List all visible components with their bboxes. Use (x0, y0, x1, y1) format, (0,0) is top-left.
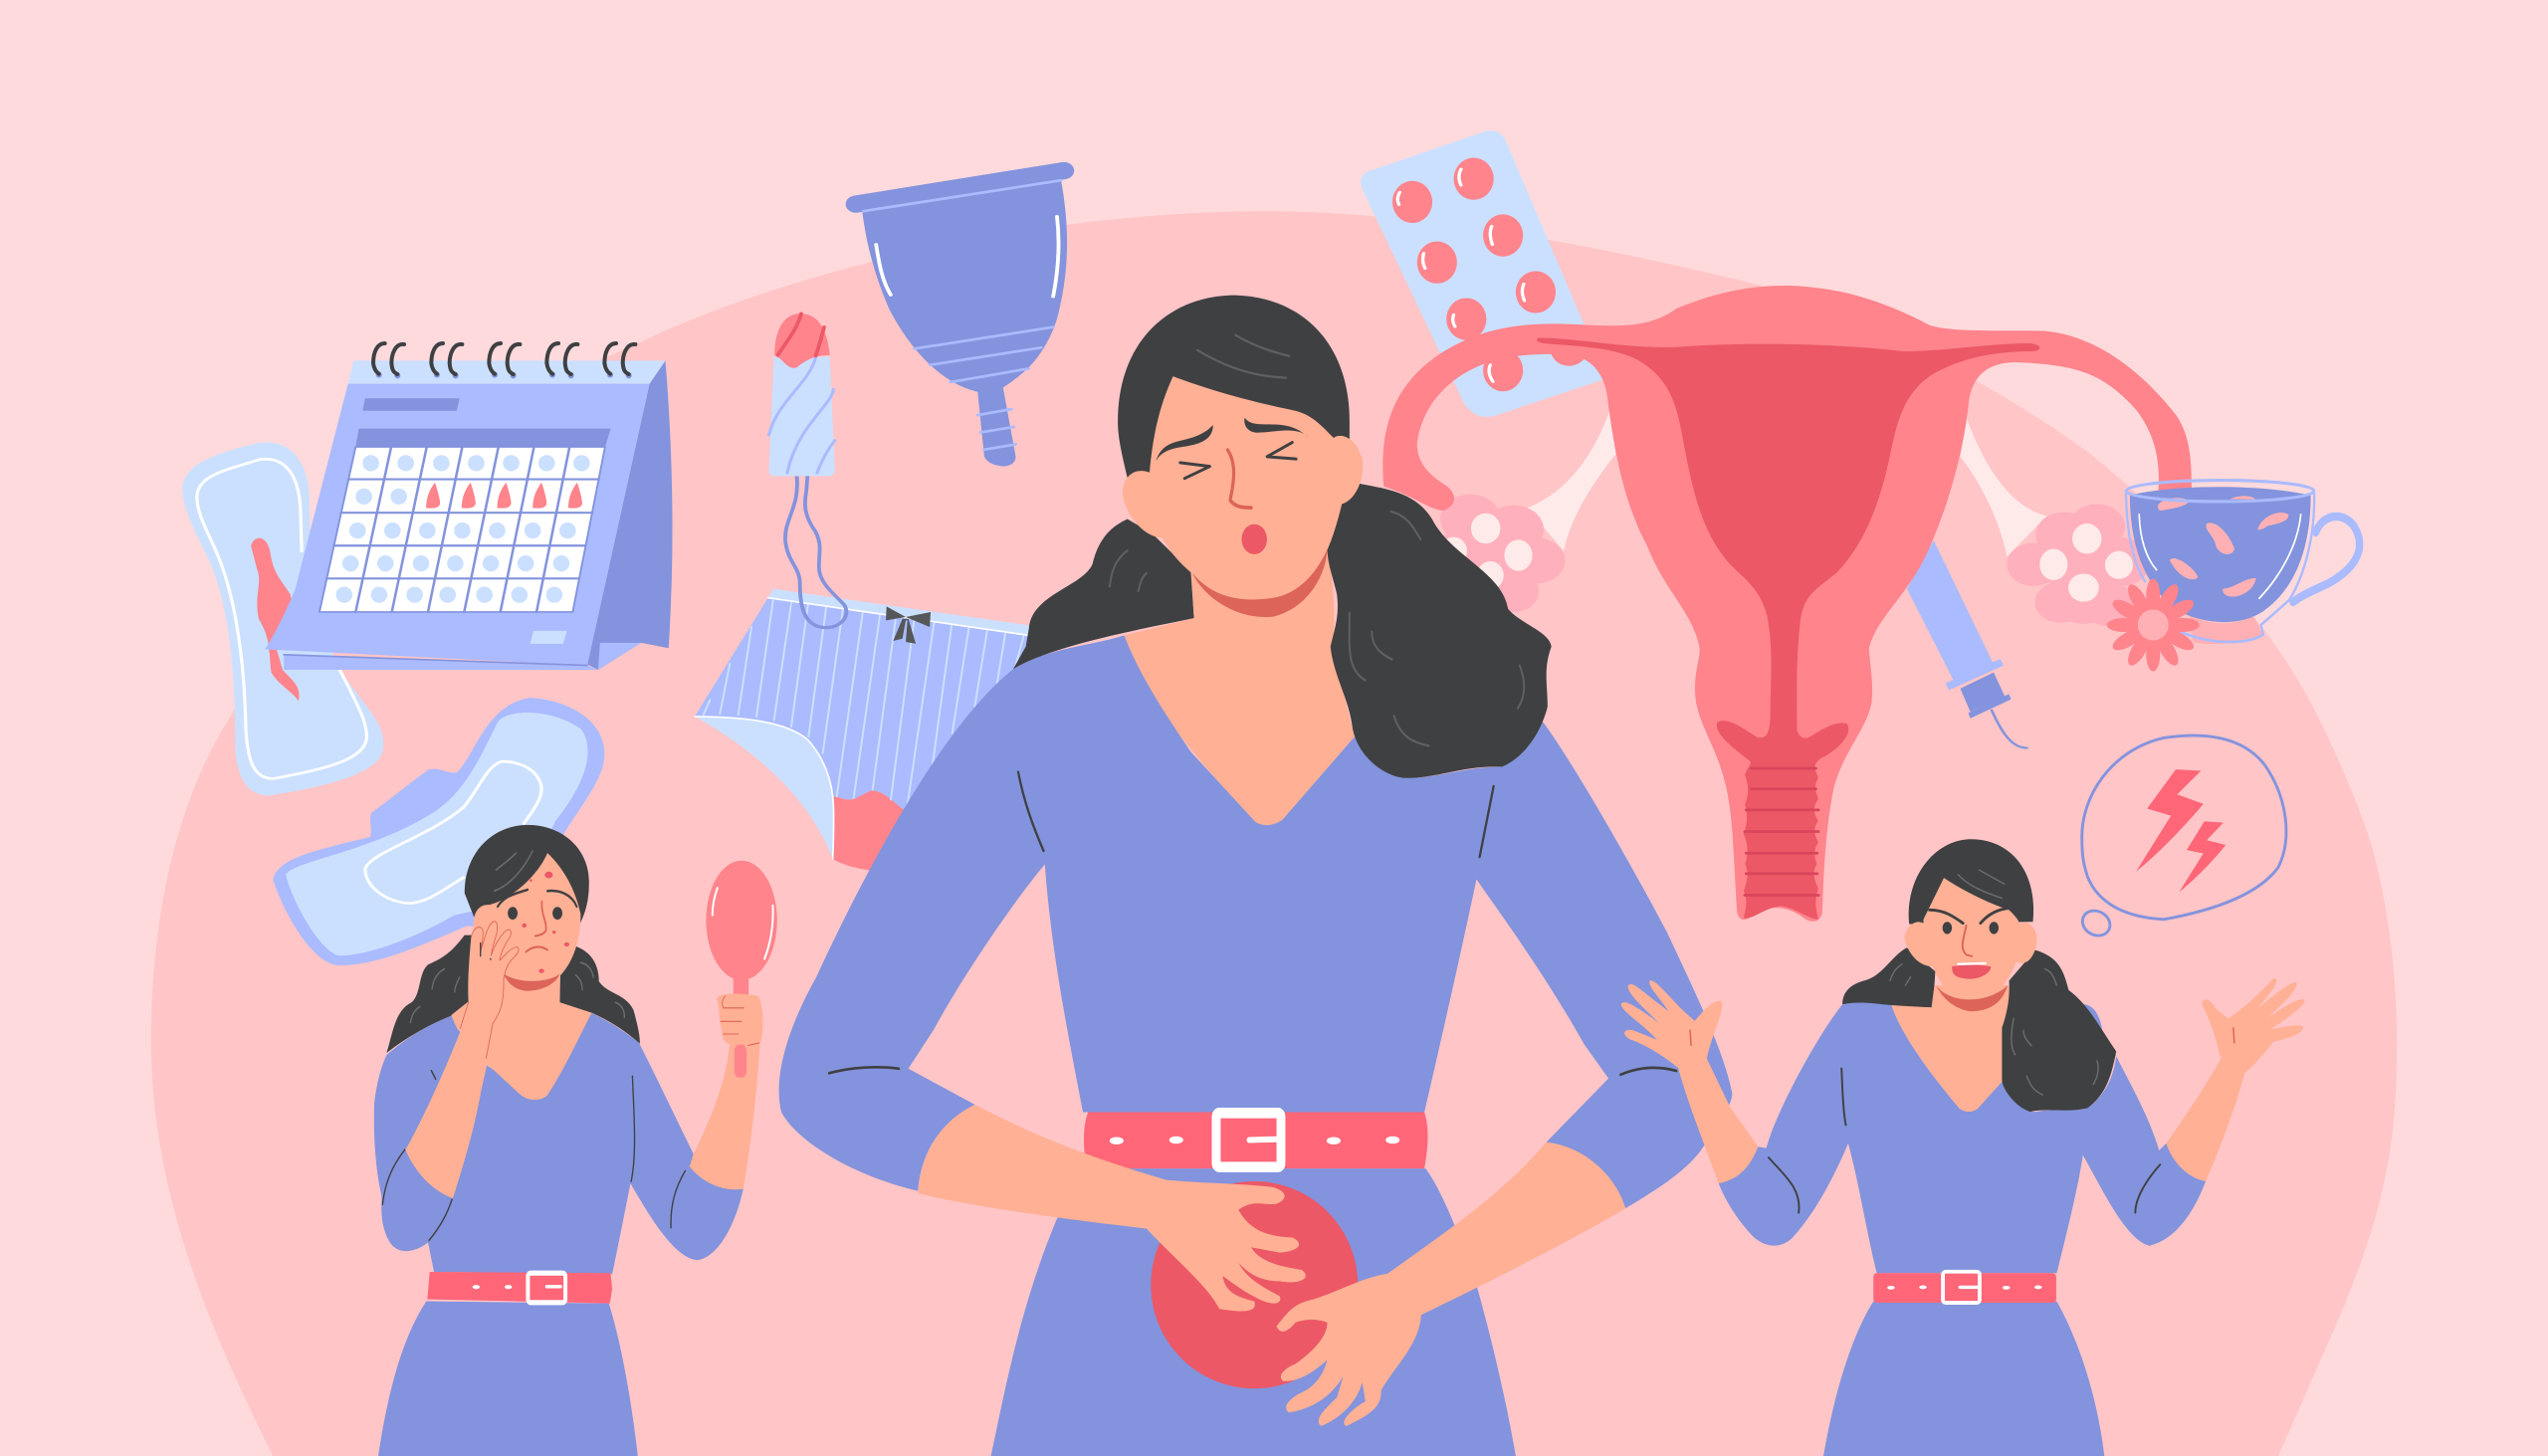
calendar grid (319, 447, 605, 612)
uterine cavity (1537, 338, 2039, 920)
angry woman with raised hands (1621, 839, 2304, 1456)
raised arm left (1621, 980, 1758, 1183)
hair strands (1890, 870, 2098, 1095)
background blob (151, 211, 2397, 1456)
belt (1084, 1113, 1427, 1168)
face (1123, 376, 1363, 617)
central woman holding abdomen (779, 296, 1732, 1456)
right ovary (1961, 419, 2150, 627)
icon: tampon (768, 313, 846, 628)
arm: right (1277, 1143, 1625, 1426)
icon: desk calendar (265, 360, 673, 670)
icon: herbal tea cup (2126, 481, 2360, 644)
hair (1013, 296, 1350, 669)
icon: underwear with stain (695, 589, 1029, 871)
hair: right lock (1328, 482, 1552, 778)
hand mirror (690, 861, 777, 1189)
creases (382, 1071, 685, 1240)
woman with acne holding mirror (374, 825, 777, 1456)
belt (1873, 1272, 2056, 1303)
raised arm right (2166, 978, 2304, 1181)
icon: syringe (1907, 540, 2026, 748)
icon: pill blister pack (1361, 130, 1607, 417)
dress creases (829, 772, 1676, 1075)
belt (427, 1272, 612, 1304)
hand on cheek (443, 922, 519, 1075)
hair (386, 825, 640, 1053)
abdominal pain circle (1151, 1181, 1358, 1388)
bow (886, 606, 931, 644)
chest (1124, 549, 1355, 825)
creases (1769, 1069, 2160, 1213)
chest (1891, 985, 2010, 1112)
chest (451, 973, 591, 1100)
left ovary (1430, 408, 1615, 612)
hair right lock (2002, 950, 2116, 1112)
dress (378, 1302, 638, 1456)
icon: vertical sanitary pad (182, 442, 383, 795)
angry face (1904, 878, 2036, 1011)
icon: flat sanitary pad (273, 698, 604, 965)
hair (1842, 839, 2033, 1007)
face with acne (474, 853, 580, 991)
dress (1823, 1302, 2104, 1456)
hair strands (410, 851, 624, 1023)
forearm raised to cheek (405, 1019, 491, 1198)
arm: left (918, 1105, 1306, 1311)
uterus diagram (1382, 286, 2192, 922)
hair strands (1110, 335, 1524, 745)
icon: ovaries (1430, 408, 2150, 627)
thought bubble with lightning (2078, 735, 2286, 940)
calendar rings (373, 343, 635, 378)
icon: menstrual cup (856, 171, 1067, 466)
flower (2107, 578, 2200, 672)
dress (779, 635, 1732, 1208)
